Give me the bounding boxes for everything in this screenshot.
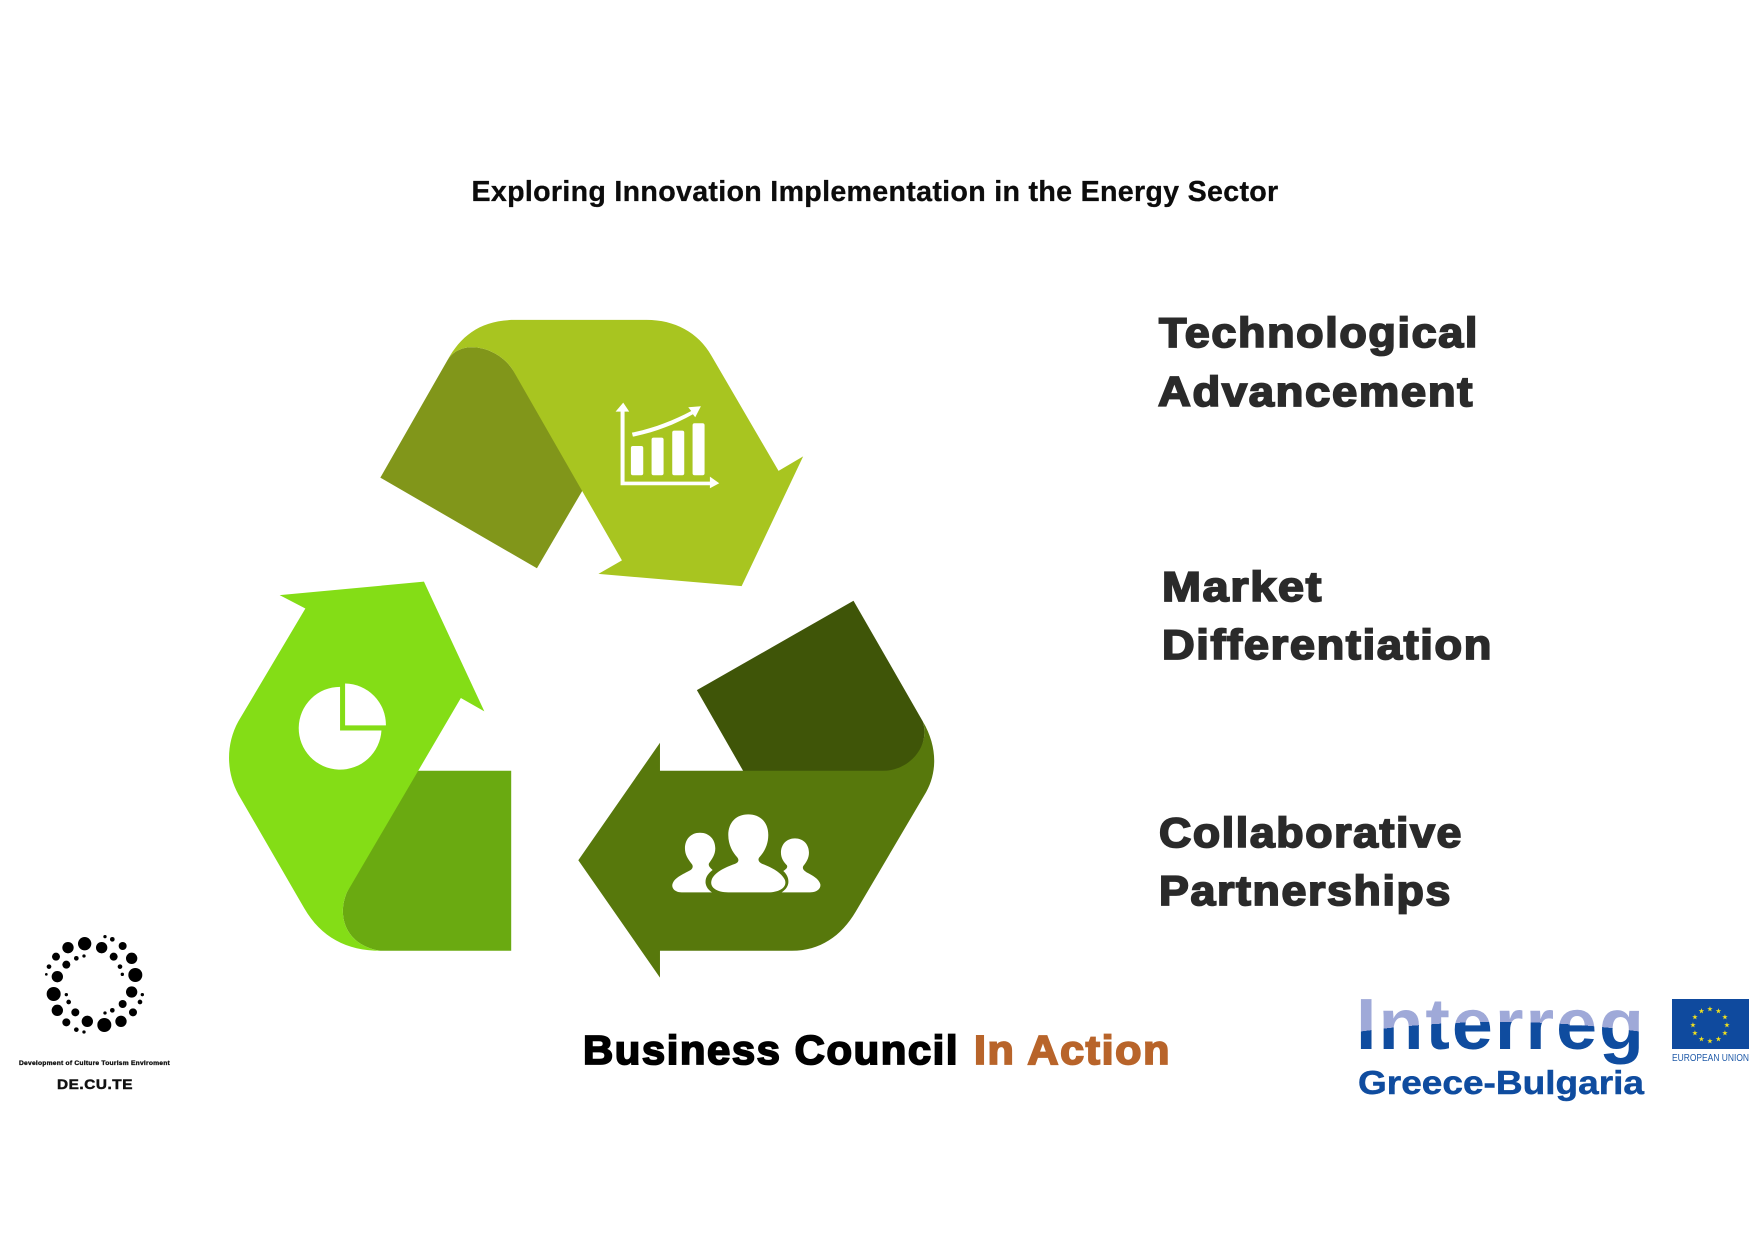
icon: stars: ★ — [1699, 1008, 1705, 1015]
label: Technological Advancement: Advancement — [1158, 368, 1474, 415]
icon: stars: ★ — [1692, 1014, 1698, 1021]
icon: stars: ★ — [1692, 1030, 1698, 1037]
tagline: Business Council In Action — [583, 1027, 1171, 1073]
icon: stars: ★ — [1707, 1038, 1713, 1045]
arrow: left — [229, 582, 511, 951]
icon: bar chart — [616, 403, 719, 488]
logo caption: Development of Culture Tourism Enviroment — [19, 1061, 170, 1067]
icon: stars: ★ — [1722, 1014, 1728, 1021]
icon: people — [672, 814, 820, 892]
logo name: DE.CU.TE — [57, 1077, 133, 1092]
icon: dotted circle — [45, 935, 144, 1034]
icon: stars: ★ — [1722, 1030, 1728, 1037]
Interreg wordmark: Interreg — [1356, 985, 1646, 1065]
icon: stars: ★ — [1690, 1022, 1696, 1029]
icon: stars: ★ — [1724, 1022, 1730, 1029]
tagline: Business Council In Action: Business Council — [583, 1027, 959, 1073]
tagline: Business Council In Action: In Action — [974, 1027, 1171, 1073]
logo: DE.CU.TE — [19, 935, 170, 1092]
label: Collaborative Partnerships: Collaborative — [1159, 809, 1463, 856]
label: Market Differentiation — [1162, 563, 1493, 668]
label: Technological Advancement — [1158, 309, 1479, 415]
arrow: right — [578, 601, 934, 978]
icon: stars: ★ — [1707, 1006, 1713, 1013]
label: Technological Advancement: Technological — [1159, 309, 1479, 356]
label: Collaborative Partnerships — [1159, 809, 1463, 914]
label: Collaborative Partnerships: Partnerships — [1159, 867, 1452, 914]
icon: stars: ★ — [1716, 1036, 1722, 1043]
logo: Interreg Greece-Bulgaria — [1356, 985, 1646, 1101]
recycling diagram — [229, 320, 934, 978]
icon: stars: ★ — [1716, 1008, 1722, 1015]
label: Market Differentiation: Market — [1162, 563, 1323, 610]
title: Exploring Innovation Implementation in the Energy Sector — [472, 176, 1278, 208]
Greece-Bulgaria wordmark: Greece-Bulgaria — [1358, 1064, 1645, 1101]
arrow: top — [380, 320, 803, 586]
logo: European Union flag — [1672, 999, 1749, 1064]
label: Market Differentiation: Differentiation — [1162, 621, 1493, 668]
icon: stars — [1690, 1006, 1730, 1045]
icon: pie chart — [299, 683, 386, 770]
icon: stars: ★ — [1699, 1036, 1705, 1043]
